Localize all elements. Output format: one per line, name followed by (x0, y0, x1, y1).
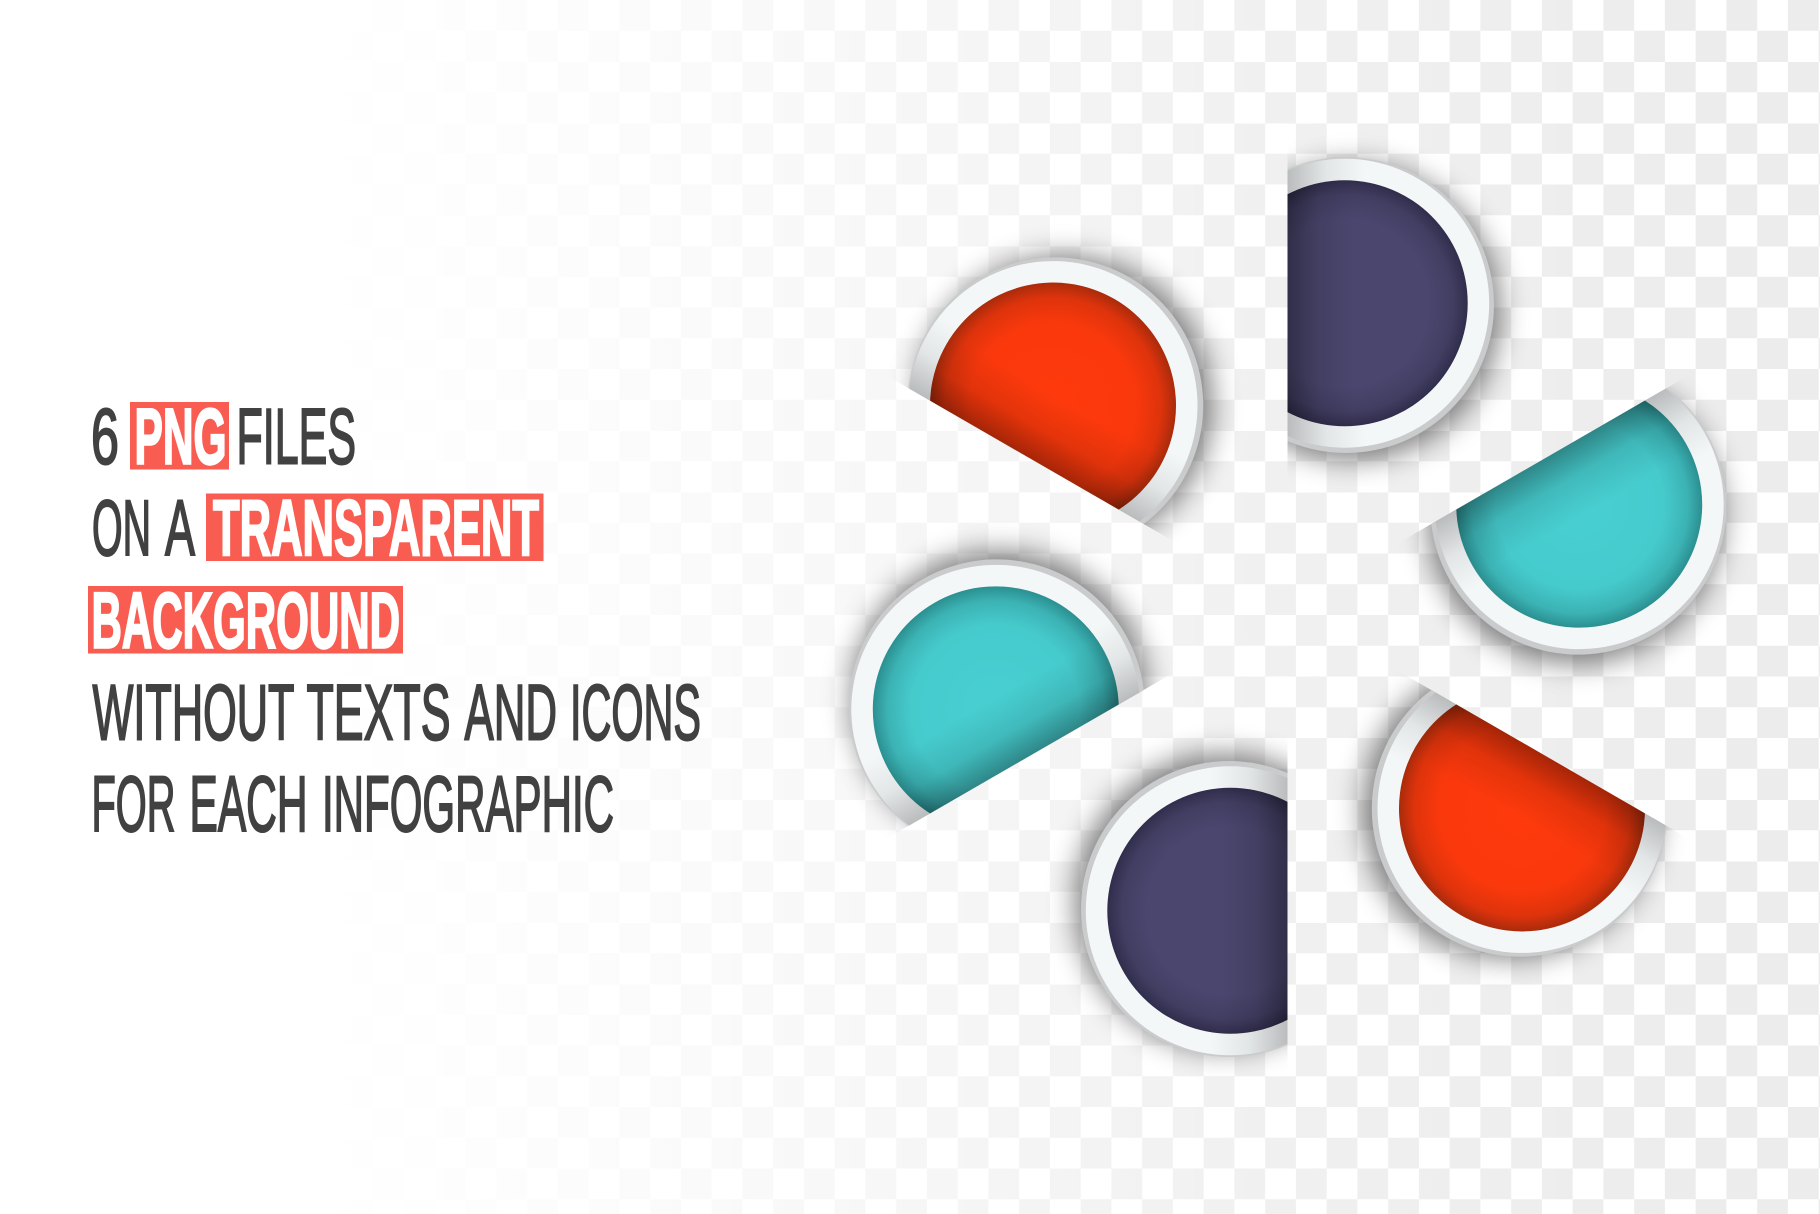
segment: teal right (1410, 382, 1742, 683)
segment: navy bottom (1056, 734, 1288, 1070)
line 4: WITHOUT TEXTS AND ICONS: WITHOUT (92, 668, 294, 756)
line 5: FOR EACH INFOGRAPHIC: INFOGRAPHIC (322, 760, 614, 848)
line 3: BACKGROUND (88, 576, 403, 664)
line 1: 6 PNG FILES: PNG (134, 392, 226, 480)
line 5: FOR EACH INFOGRAPHIC: EACH (190, 760, 308, 848)
segment: red upper left (898, 236, 1232, 536)
heading text block (88, 392, 701, 848)
line 5: FOR EACH INFOGRAPHIC (92, 760, 614, 848)
line 3: BACKGROUND: BACKGROUND (92, 576, 400, 664)
line 4: WITHOUT TEXTS AND ICONS: ICONS (570, 668, 701, 756)
segment: navy top (1288, 144, 1520, 480)
line 5: FOR EACH INFOGRAPHIC: FOR (92, 760, 176, 848)
line 2: ON A TRANSPARENT (92, 484, 544, 572)
line 1: 6 PNG FILES: FILES (236, 392, 356, 480)
line 2: ON A TRANSPARENT: A (165, 484, 195, 572)
line 1: 6 PNG FILES (91, 392, 356, 480)
line 4: WITHOUT TEXTS AND ICONS: TEXTS (306, 668, 450, 756)
line 4: WITHOUT TEXTS AND ICONS (92, 668, 701, 756)
line 2: ON A TRANSPARENT: TRANSPARENT (213, 484, 539, 572)
line 1: 6 PNG FILES: 6 (91, 392, 119, 480)
segment: teal left (832, 531, 1166, 832)
line 4: WITHOUT TEXTS AND ICONS: AND (464, 668, 557, 756)
line 2: ON A TRANSPARENT: ON (92, 484, 151, 572)
segment: red lower right (1344, 678, 1676, 978)
